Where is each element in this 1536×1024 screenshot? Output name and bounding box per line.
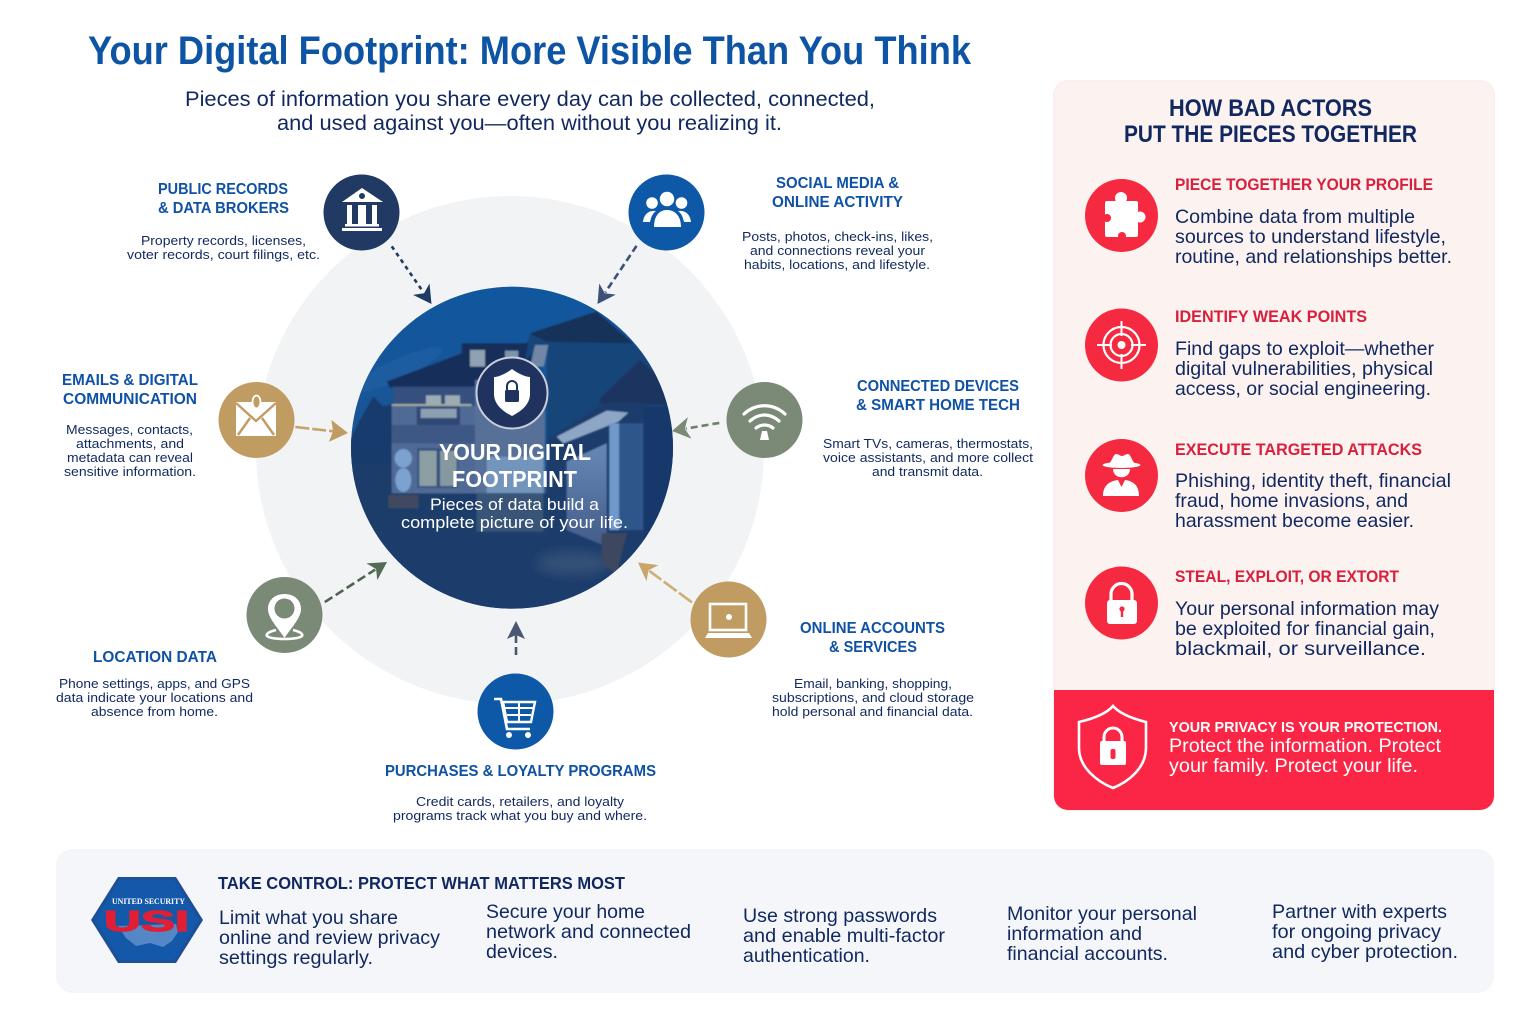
- arrow: public records: [384, 241, 440, 310]
- step: identify weak points: [1175, 308, 1434, 400]
- icon: purchases cart: [478, 674, 554, 750]
- step: execute targeted attacks: [1175, 441, 1451, 532]
- panel heading: [1124, 95, 1417, 148]
- tip: monitor accounts: information and: [1007, 923, 1142, 945]
- callout text: [1169, 719, 1442, 777]
- step: piece together your profile: sources to understand lifestyle,: [1175, 226, 1446, 248]
- arrow: purchases: [507, 621, 525, 655]
- label: social media: [742, 175, 933, 272]
- tip: partner with experts: [1272, 901, 1458, 963]
- icon: padlock: [1085, 566, 1158, 640]
- arrow: location: [319, 554, 392, 610]
- logo: United Security USI: [91, 877, 203, 963]
- step: execute targeted attacks: fraud, home invasions, and: [1175, 490, 1408, 512]
- tip: strong passwords: and enable multi-factor: [743, 925, 946, 947]
- step: steal, exploit, or extort: STEAL, EXPLOIT, OR EXTORT: [1175, 568, 1399, 586]
- step: steal, exploit, or extort: [1175, 568, 1439, 660]
- badge: shield and padlock: [476, 358, 548, 428]
- step: identify weak points: digital vulnerabilities, physical: [1175, 358, 1433, 380]
- heading: take control: TAKE CONTROL: PROTECT WHAT MATTERS MOST: [218, 873, 625, 893]
- tip: secure your home: [486, 901, 691, 963]
- icon: location pin: [246, 577, 322, 653]
- central circle text: complete picture of your life.: [401, 513, 628, 532]
- icon: social media people: [628, 174, 704, 250]
- callout text: your family. Protect your life.: [1169, 755, 1418, 777]
- logo: United Security USI: USI: [104, 906, 189, 938]
- tip: monitor accounts: financial accounts.: [1007, 943, 1168, 965]
- label: emails: metadata can reveal: [67, 450, 193, 465]
- tip: partner with experts: and cyber protection.: [1272, 941, 1458, 963]
- tip: limit what you share: settings regularly.: [219, 947, 373, 969]
- label: purchases: Credit cards, retailers, and loyalty: [416, 794, 624, 809]
- tip: limit what you share: Limit what you share: [219, 907, 398, 929]
- arrow: social media: [589, 240, 645, 310]
- tip: partner with experts: for ongoing privacy: [1272, 921, 1441, 943]
- label: emails: sensitive information.: [64, 464, 196, 479]
- step: piece together your profile: PIECE TOGETHER YOUR PROFILE: [1175, 176, 1433, 194]
- icon: target: [1085, 308, 1158, 382]
- step: steal, exploit, or extort: Your personal information may: [1175, 598, 1439, 620]
- label: online accounts: subscriptions, and cloud storage: [772, 690, 974, 705]
- label: social media: ONLINE ACTIVITY: [772, 194, 904, 211]
- subtitle: and used against you—often without you realizing it.: [277, 112, 782, 135]
- panel: how bad actors put the pieces together: [1054, 81, 1494, 810]
- backdrop circle: [256, 196, 764, 704]
- central circle text: [401, 439, 628, 532]
- tip: secure your home: Secure your home: [486, 901, 645, 923]
- label: location data: LOCATION DATA: [93, 649, 217, 666]
- icon: public records building: [324, 174, 400, 250]
- step: execute targeted attacks: Phishing, identity theft, financial: [1175, 470, 1451, 492]
- tip: strong passwords: Use strong passwords: [743, 905, 937, 927]
- tip: limit what you share: [219, 907, 440, 969]
- label: emails: Messages, contacts,: [66, 422, 193, 437]
- subtitle: [185, 88, 875, 135]
- panel: take control: [57, 850, 1493, 992]
- label: location data: Phone settings, apps, and GPS: [59, 676, 250, 691]
- tip: secure your home: network and connected: [486, 921, 691, 943]
- label: public records: & DATA BROKERS: [158, 200, 289, 217]
- central circle text: Pieces of data build a: [430, 495, 600, 514]
- icon: connected devices wifi: [726, 382, 802, 458]
- label: location data: [56, 649, 253, 719]
- label: connected devices: & SMART HOME TECH: [856, 397, 1020, 414]
- central circle text: FOOTPRINT: [452, 466, 577, 492]
- label: emails: EMAILS & DIGITAL: [62, 372, 198, 389]
- label: online accounts: hold personal and financial data.: [772, 704, 973, 719]
- step: identify weak points: IDENTIFY WEAK POINTS: [1175, 308, 1367, 326]
- label: connected devices: Smart TVs, cameras, thermostats,: [823, 436, 1033, 451]
- arrow: online accounts: [632, 554, 698, 610]
- label: social media: SOCIAL MEDIA &: [776, 175, 899, 192]
- tip: monitor accounts: Monitor your personal: [1007, 903, 1197, 925]
- label: location data: data indicate your locations and: [56, 690, 253, 705]
- logo: United Security USI: UNITED SECURITY: [112, 897, 185, 906]
- step: piece together your profile: Combine data from multiple: [1175, 206, 1415, 228]
- tip: monitor accounts: [1007, 903, 1197, 965]
- label: public records: [127, 181, 320, 262]
- label: connected devices: voice assistants, and more collect: [823, 450, 1033, 465]
- label: social media: habits, locations, and lifestyle.: [744, 257, 930, 272]
- label: purchases: [385, 763, 656, 823]
- step: identify weak points: Find gaps to exploit—whether: [1175, 338, 1434, 360]
- arrow: connected devices: [670, 412, 721, 442]
- label: connected devices: [823, 378, 1033, 479]
- callout text: YOUR PRIVACY IS YOUR PROTECTION.: [1169, 719, 1442, 736]
- label: public records: voter records, court filings, etc.: [127, 247, 320, 262]
- panel heading: PUT THE PIECES TOGETHER: [1124, 121, 1417, 148]
- central circle text: YOUR DIGITAL: [439, 439, 591, 465]
- label: purchases: programs track what you buy and where.: [393, 808, 647, 823]
- icon: emails envelope: [218, 382, 294, 458]
- step: piece together your profile: [1175, 176, 1452, 268]
- label: online accounts: [772, 620, 974, 719]
- label: social media: and connections reveal your: [750, 243, 926, 258]
- subtitle: Pieces of information you share every day can be collected, connected,: [185, 88, 875, 111]
- icon: puzzle piece: [1085, 179, 1158, 252]
- step: steal, exploit, or extort: blackmail, or surveillance.: [1175, 638, 1426, 660]
- label: online accounts: & SERVICES: [829, 639, 917, 656]
- step: identify weak points: access, or social engineering.: [1175, 378, 1431, 400]
- label: emails: [62, 372, 198, 479]
- label: connected devices: and transmit data.: [872, 464, 983, 479]
- label: online accounts: Email, banking, shopping,: [794, 676, 952, 691]
- callout: your privacy is your protection: [1054, 690, 1494, 810]
- callout text: Protect the information. Protect: [1169, 735, 1442, 757]
- tip: strong passwords: [743, 905, 946, 967]
- label: public records: Property records, licenses,: [141, 233, 306, 248]
- tip: limit what you share: online and review privacy: [219, 927, 440, 949]
- step: piece together your profile: routine, and relationships better.: [1175, 246, 1452, 268]
- step: steal, exploit, or extort: be exploited for financial gain,: [1175, 618, 1435, 640]
- panel heading: HOW BAD ACTORS: [1169, 95, 1372, 122]
- step: execute targeted attacks: harassment become easier.: [1175, 510, 1414, 532]
- step: execute targeted attacks: EXECUTE TARGETED ATTACKS: [1175, 441, 1422, 459]
- label: emails: attachments, and: [76, 436, 184, 451]
- icon: shield with lock: [1079, 706, 1146, 788]
- label: location data: absence from home.: [91, 704, 218, 719]
- tip: strong passwords: authentication.: [743, 945, 870, 967]
- label: connected devices: CONNECTED DEVICES: [857, 378, 1019, 395]
- central photo circle: house at night: [347, 283, 680, 613]
- label: purchases: PURCHASES & LOYALTY PROGRAMS: [385, 763, 656, 780]
- label: emails: COMMUNICATION: [63, 391, 197, 408]
- label: online accounts: ONLINE ACCOUNTS: [800, 620, 945, 637]
- label: social media: Posts, photos, check-ins, likes,: [742, 229, 933, 244]
- label: public records: PUBLIC RECORDS: [158, 181, 288, 198]
- icon: hacker in hat: [1085, 439, 1158, 512]
- title: Your Digital Footprint: More Visible Than You Think: [88, 29, 972, 73]
- arrow: emails: [294, 416, 349, 444]
- tip: secure your home: devices.: [486, 941, 558, 963]
- icon: online accounts laptop: [690, 582, 766, 658]
- tip: partner with experts: Partner with experts: [1272, 901, 1447, 923]
